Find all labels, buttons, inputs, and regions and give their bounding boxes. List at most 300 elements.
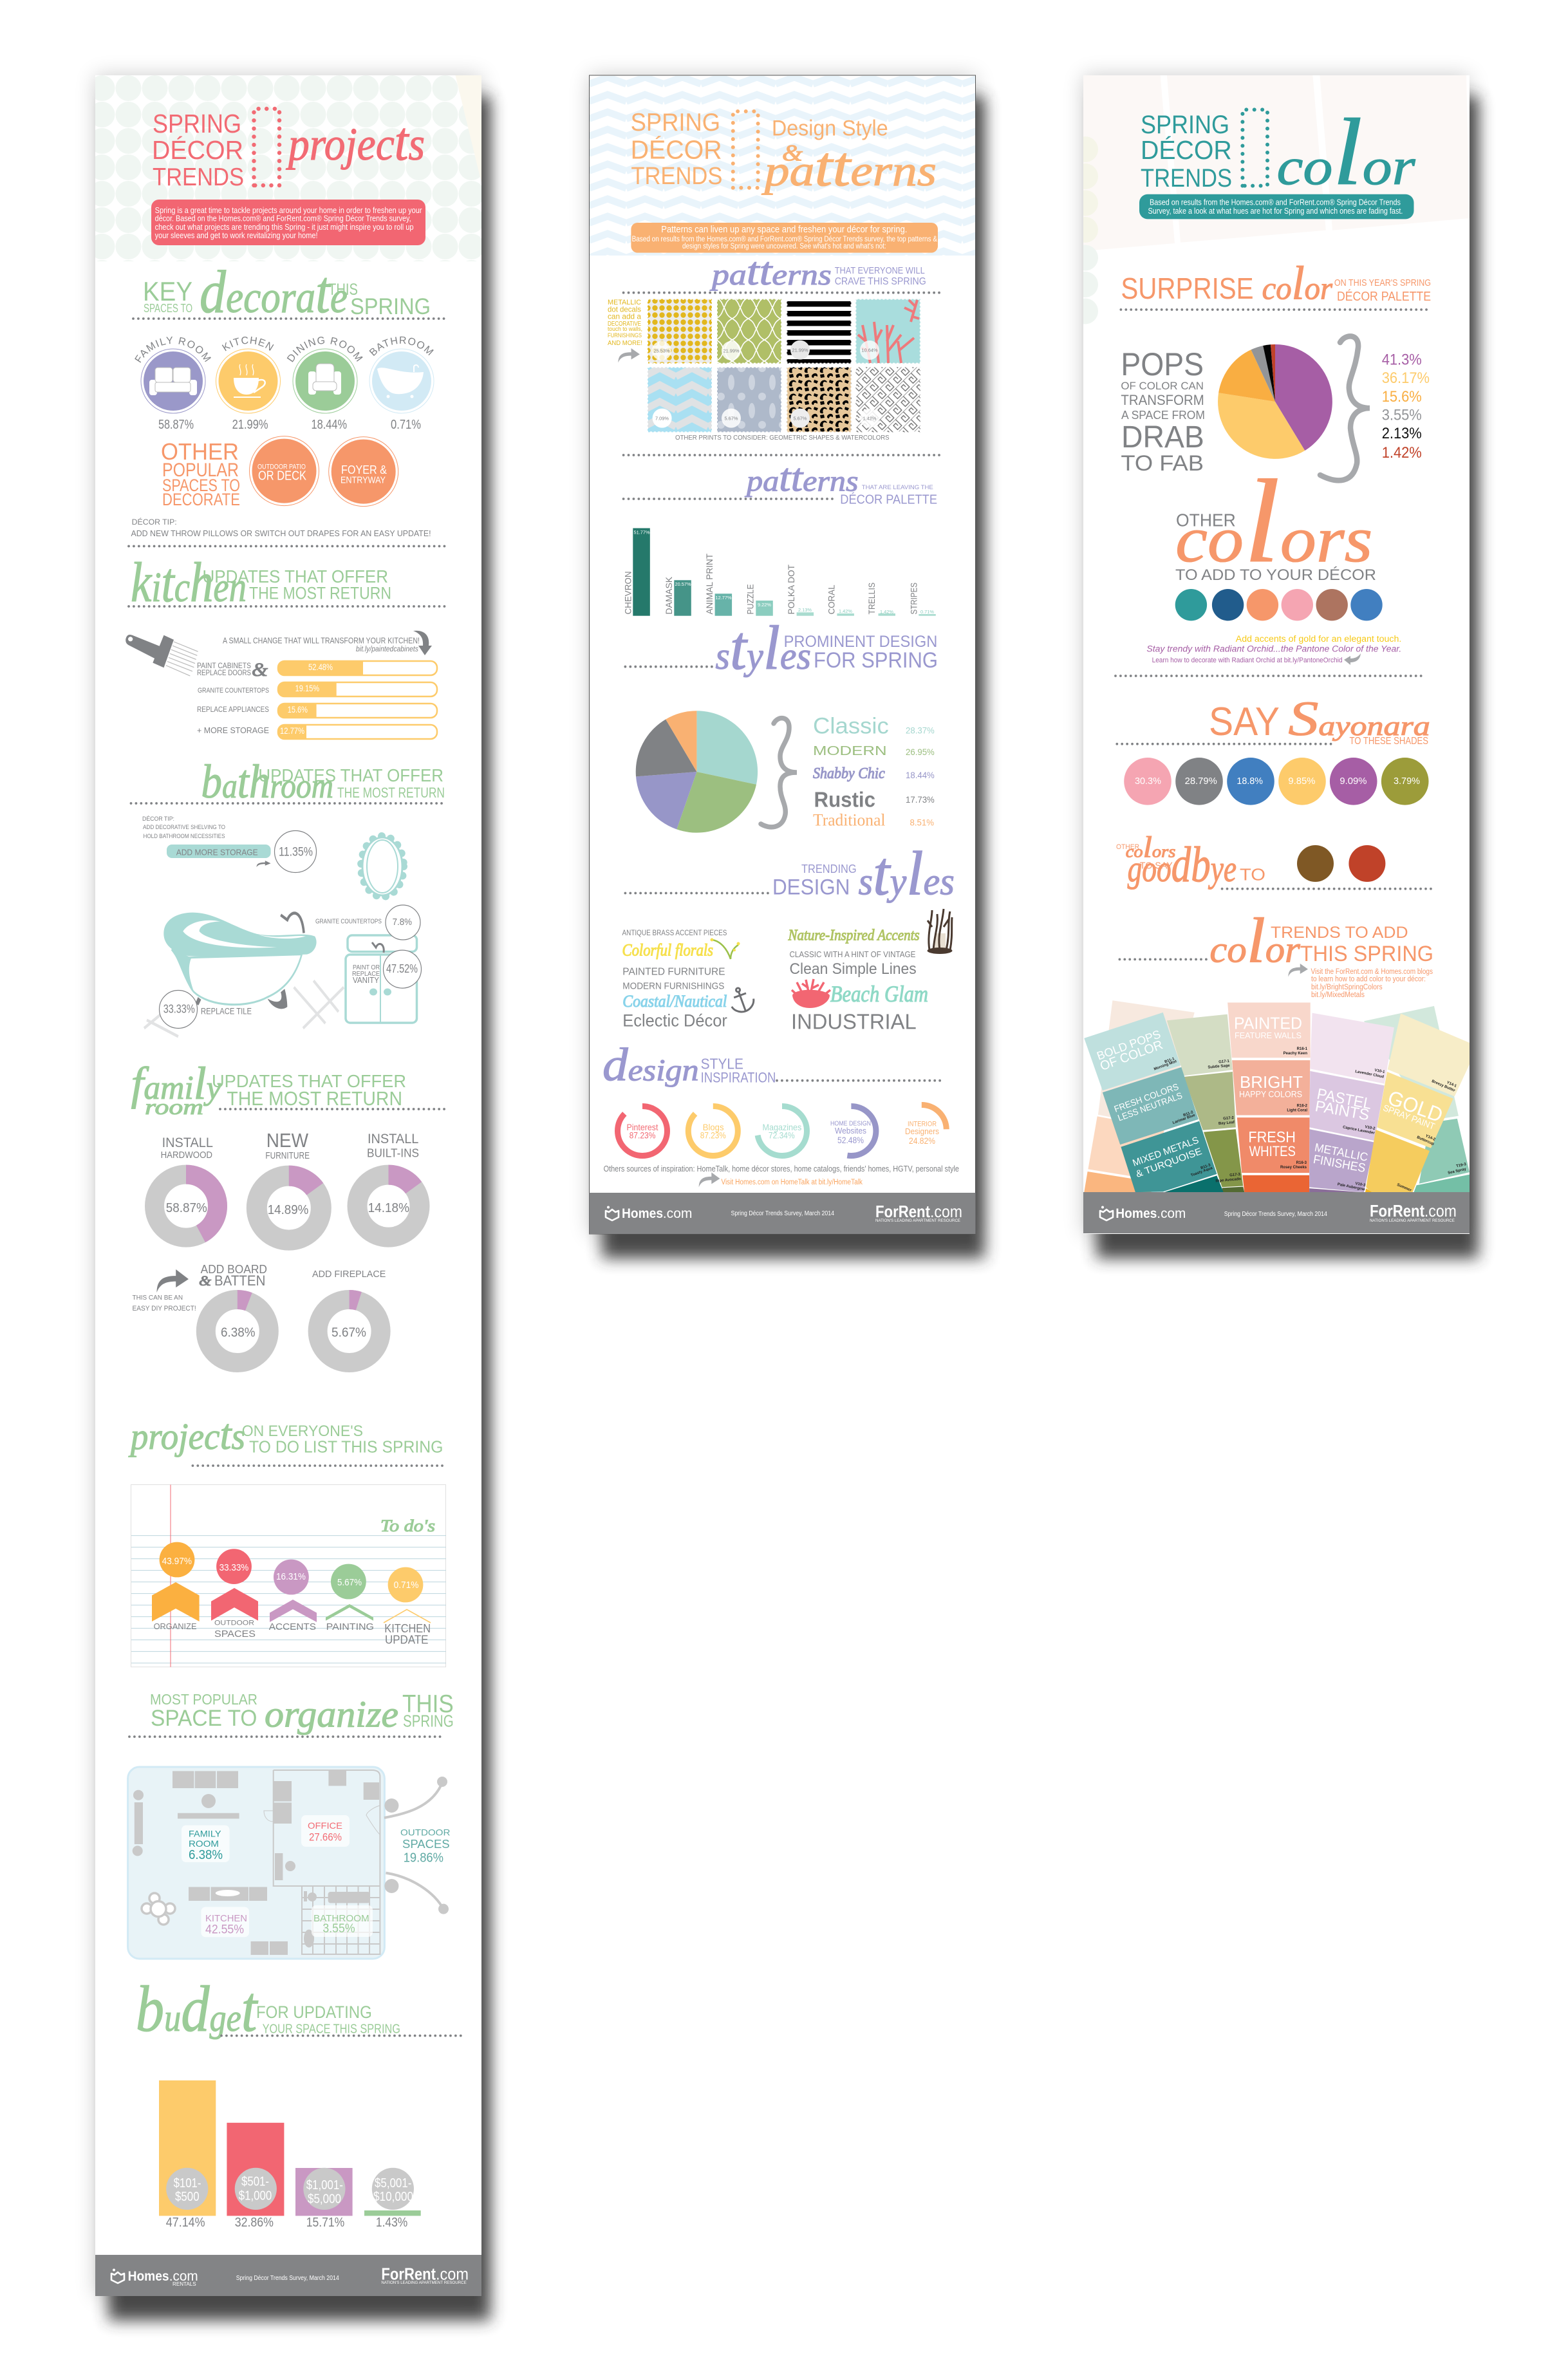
chip color names: Light Coral <box>1287 1108 1307 1112</box>
chip color names: Larimar Blue <box>1172 1114 1196 1125</box>
chip color names: Y14-2 <box>1424 1134 1436 1142</box>
chip color names: Buttercup <box>1416 1135 1435 1146</box>
donut: new furniture: NEW <box>266 1129 309 1152</box>
bar chart: leaving patterns: TRELLIS <box>867 583 877 614</box>
swatch: trellis: 21.99% <box>723 348 740 354</box>
bathroom decor tip <box>142 816 225 839</box>
swatches: shades to say sayonara: 9.85% <box>1288 776 1316 787</box>
heading: bathroom updates: UPDATES THAT OFFER <box>258 765 443 785</box>
text: pops of color: TRANSFORM <box>1121 392 1204 408</box>
heading: design style inspiration: INSPIRATION <box>701 1069 776 1085</box>
bar chart: budget: $1,001- <box>306 2178 343 2192</box>
label: family room <box>182 1826 229 1862</box>
swatches: shades to say sayonara: 9.09% <box>1339 776 1367 787</box>
heading: family room updates: room <box>145 1096 203 1119</box>
legend: design styles: 8.51% <box>910 817 934 828</box>
bar chart: kitchen updates: 12.77% <box>280 725 304 736</box>
heading: projects on everyone's to do list: TO DO LIST THIS SPRING <box>249 1437 443 1456</box>
chip color names <box>1153 1047 1467 1193</box>
list: trending styles left: Eclectic Décor <box>622 1011 727 1030</box>
title: spring decor trends projects: DÉCOR <box>152 135 243 165</box>
chip text: blue chip: BOLD POPS <box>1095 1027 1162 1063</box>
heading: patterns everyone will crave: THAT EVERYONE WILL <box>835 265 925 276</box>
metallic dots note: DECORATIVE <box>608 321 641 328</box>
callout: intro: check out what projects are trending this Spring - it just might inspire you to roll up <box>155 223 414 232</box>
key space percentages: 0.71% <box>391 418 421 432</box>
add more storage label and value: 11.35% <box>279 846 313 859</box>
swatch: polka dots: 25.53% <box>654 348 670 354</box>
ring: blogs <box>688 1106 738 1156</box>
label: kitchen: KITCHEN <box>205 1913 247 1924</box>
swatches: shades to say sayonara: 18.8% <box>1237 776 1263 787</box>
donut: install built-ins: INSTALL <box>368 1132 418 1146</box>
footer: projects panel: .com <box>436 2265 469 2284</box>
bar chart: leaving patterns: DAMASK <box>664 577 674 614</box>
heading: most popular space to organize: SPRING <box>403 1711 454 1730</box>
shadow: patterns panel <box>590 75 985 1258</box>
panel: color <box>1072 75 1470 1234</box>
callout: intro: Spring is a great time to tackle projects around your home in order to freshen up your <box>155 206 422 215</box>
heading: other colors to say goodbye to: OTHER <box>1116 843 1139 851</box>
footer: patterns panel: .com <box>930 1202 962 1221</box>
heading: other popular spaces: OTHER <box>161 438 239 465</box>
swatch: animal print: 5.67% <box>793 416 807 421</box>
icon: twig vase <box>927 909 953 954</box>
title: spring decor trends design style and patterns <box>631 109 937 198</box>
heading: patterns leaving the palette: patterns <box>745 457 859 500</box>
icon: family room circle <box>135 336 211 413</box>
heading: other popular spaces: SPACES TO <box>162 476 240 495</box>
heading: most popular space to organize <box>150 1690 454 1735</box>
legend: design styles: Traditional <box>813 811 886 830</box>
list: trending styles left <box>622 928 756 1030</box>
heading: most popular space to organize: MOST POPULAR <box>150 1691 257 1708</box>
chip text: lavender chip: METALLIC <box>1314 1141 1369 1164</box>
heading: surprise color: SURPRISE <box>1121 272 1254 305</box>
chip color names: Subtle Sage <box>1208 1064 1231 1070</box>
heading: family room updates <box>131 1058 406 1119</box>
note: gold and radiant orchid: Learn how to decorate with Radiant Orchid at bit.ly/PantoneOrchid <box>1152 657 1343 664</box>
swatches: goodbye colors <box>1297 845 1385 882</box>
legend: color percentages <box>1382 351 1430 462</box>
heading: kitchen updates <box>131 552 391 614</box>
heading: patterns leaving the palette <box>745 457 937 507</box>
bar chart: budget: $500 <box>175 2190 200 2204</box>
heading: trending design styles: DESIGN <box>772 875 850 900</box>
key space percentages: 18.44% <box>312 418 347 432</box>
heading: other colors to say goodbye to: TO SAY <box>1140 861 1173 872</box>
ring: magazines: 72.34% <box>769 1130 795 1141</box>
legend: design styles <box>813 714 935 830</box>
list: trending styles right: Nature-Inspired Accents <box>788 928 920 944</box>
icon: vanity: 47.52% <box>386 962 418 975</box>
chip color names: B11-1 <box>1164 1057 1175 1064</box>
footer: patterns panel: Spring Décor Trends Survey, March 2014 <box>731 1210 834 1217</box>
heading: family room updates: THE MOST RETURN <box>227 1087 402 1110</box>
donut: new furniture: FURNITURE <box>265 1150 310 1161</box>
header background paint chips <box>1072 75 1470 324</box>
icon: bathroom circle <box>369 336 434 413</box>
outdoor spaces: OUTDOOR <box>400 1827 450 1837</box>
callout: intro: décor. Based on the Homes.com® and ForRent.com® Spring Décor Trends survey, <box>155 214 411 223</box>
note: gold and radiant orchid: Stay trendy with Radiant Orchid...the Pantone Color of the Year. <box>1146 644 1401 654</box>
label: office: OFFICE <box>308 1820 342 1831</box>
bathroom decor tip: DÉCOR TIP: <box>142 816 174 823</box>
title: spring decor trends design style and patterns: Design Style <box>772 117 888 141</box>
metallic dots note: can add a <box>608 312 641 321</box>
title: spring decor trends color <box>1141 100 1416 205</box>
item: organize: 43.97% <box>162 1556 192 1567</box>
item: outdoor spaces: 33.33% <box>219 1563 248 1573</box>
legend: design styles: Classic <box>813 714 889 739</box>
list: trending styles left: MODERN FURNISHINGS <box>622 980 724 991</box>
chip text: coral chip: FRESH <box>1248 1129 1296 1146</box>
heading: design style inspiration <box>602 1039 776 1091</box>
bar chart: kitchen updates: REPLACE APPLIANCES <box>197 705 269 714</box>
header background polka dots <box>95 75 481 261</box>
bar chart: kitchen updates <box>197 659 437 739</box>
bar chart: budget: $1,000 <box>239 2189 272 2203</box>
item: kitchen update: UPDATE <box>385 1634 429 1647</box>
swatch: chevron: 7.09% <box>655 416 669 421</box>
item: painting: 5.67% <box>337 1578 362 1588</box>
heading: key spaces to decorate: KEY <box>143 276 192 306</box>
icon: vanity: PAINT OR <box>353 964 380 971</box>
kitchen note and arrow: bit.ly/paintedcabinets <box>356 644 418 653</box>
chip color names: Sea Spray <box>1448 1167 1467 1175</box>
bar chart: leaving patterns: CORAL <box>827 584 837 614</box>
icon: floral sprig <box>711 939 740 959</box>
list: trending styles left: Coastal/Nautical <box>622 992 727 1011</box>
chip color names: B11-3 <box>1200 1163 1211 1170</box>
heading: trending design styles <box>772 839 955 909</box>
legend: color percentages: 15.6% <box>1382 388 1422 406</box>
chip text: lavender chip: PAINTS <box>1314 1097 1370 1124</box>
ring: magazines <box>757 1106 807 1156</box>
bar chart: leaving patterns <box>623 528 936 616</box>
swatches: colors to add <box>1175 589 1383 621</box>
chip color names: G17-3 <box>1229 1173 1241 1177</box>
chip color names: V10-2 <box>1365 1125 1376 1131</box>
heading: patterns everyone will crave: CRAVE THIS SPRING <box>835 276 926 287</box>
footer: projects panel <box>95 2255 481 2296</box>
title: spring decor trends projects: projects <box>285 110 425 172</box>
donut: add fireplace: ADD FIREPLACE <box>312 1269 386 1280</box>
swatches: shades to say sayonara: 28.79% <box>1185 776 1217 787</box>
ring: home design websites: 52.48% <box>837 1135 864 1145</box>
ring: home design websites: HOME DESIGN <box>830 1119 871 1127</box>
heading: patterns leaving the palette: THAT ARE LEAVING THE <box>862 484 933 491</box>
metallic dots note <box>608 299 642 362</box>
heading: other colors to say goodbye to: colors <box>1126 831 1175 864</box>
icon: coral <box>792 979 830 1008</box>
footer: projects panel: Homes <box>128 2269 169 2284</box>
chip text: lavender chip <box>1312 1085 1373 1175</box>
panel: patterns <box>590 75 976 1234</box>
bar chart: kitchen updates: + MORE STORAGE <box>197 725 269 735</box>
metallic dots note: dot decals <box>608 304 641 313</box>
bathroom decor tip: ADD DECORATIVE SHELVING TO <box>143 824 225 830</box>
item: outdoor spaces: OUTDOOR <box>214 1619 254 1627</box>
chart: notebook to do list <box>131 1484 446 1667</box>
heading: most popular space to organize: organize <box>265 1693 398 1735</box>
badge: foyer and entryway: FOYER & <box>341 463 387 476</box>
heading: surprise color: DÉCOR PALETTE <box>1337 289 1431 304</box>
title: spring decor trends design style and patterns: DÉCOR <box>631 135 722 164</box>
chip text: coral chip: HAPPY COLORS <box>1239 1089 1302 1099</box>
chip text: blue chip: OF COLOR <box>1098 1038 1165 1074</box>
floor plan <box>128 1767 384 1959</box>
metallic dots note: AND MORE! <box>608 340 642 347</box>
bar chart: budget: $101- <box>174 2176 201 2190</box>
bar chart: kitchen updates: & <box>252 659 268 680</box>
footer: patterns panel: Homes <box>622 1206 663 1221</box>
label: family room: 6.38% <box>189 1848 223 1862</box>
heading: key spaces to decorate <box>143 259 431 326</box>
heading: other popular spaces <box>161 438 240 509</box>
label: office <box>301 1815 350 1847</box>
icon: kitchen circle <box>216 336 281 413</box>
bar chart: kitchen updates: 52.48% <box>308 662 333 672</box>
item: accents: 16.31% <box>276 1572 306 1582</box>
heading: surprise color <box>1121 257 1431 310</box>
donut: install built-ins: BUILT-INS <box>367 1147 419 1160</box>
heading: family room updates: UPDATES THAT OFFER <box>212 1071 406 1091</box>
callout: patterns intro: Patterns can liven up any space and freshen your décor for spring. <box>661 225 907 235</box>
heading: other popular spaces: POPULAR <box>162 460 239 481</box>
icon: vanity <box>346 905 421 1023</box>
donut: add board and batten: & <box>199 1273 212 1289</box>
text: pops of color: POPS <box>1121 346 1204 382</box>
heading: say sayonara <box>1209 692 1430 747</box>
shadow: projects panel <box>95 75 490 2321</box>
callout: color intro <box>1139 194 1414 219</box>
heading: key spaces to decorate: SPRING <box>350 294 431 319</box>
label: bathroom: 3.55% <box>322 1922 355 1936</box>
icon: dining room circle <box>287 337 363 413</box>
bar chart: budget: $5,000 <box>308 2192 341 2206</box>
heading: most popular space to organize: THIS <box>402 1690 454 1718</box>
label: office: 27.66% <box>309 1831 342 1844</box>
bar chart: kitchen updates: REPLACE DOORS <box>197 668 251 677</box>
list: trending styles right: CLASSIC WITH A HINT OF VINTAGE <box>789 949 916 959</box>
title: spring decor trends color: DÉCOR <box>1141 135 1232 165</box>
badge: outdoor patio or deck: OR DECK <box>258 469 307 483</box>
label: kitchen: 42.55% <box>205 1923 244 1937</box>
bar chart: kitchen updates: GRANITE COUNTERTOPS <box>198 687 269 695</box>
note: visit blogs <box>1288 964 1433 999</box>
icon: bathroom circle: BATHROOM <box>369 336 434 356</box>
callout: patterns intro: design styles for Spring were uncovered. See what's hot and what's not: <box>682 243 886 250</box>
heading: styles prominent design: PROMINENT DESIGN <box>784 633 937 651</box>
note: visit blogs: to learn how to add color to your décor: <box>1311 976 1426 984</box>
swatch: stripes <box>787 299 851 364</box>
key space percentages: 58.87% <box>158 418 194 432</box>
chip color names: Ripe Avocado <box>1215 1177 1242 1183</box>
arrow and DIY note: THIS CAN BE AN <box>133 1294 183 1302</box>
heading: projects on everyone's to do list <box>128 1410 443 1459</box>
bar chart: leaving patterns: CHEVRON <box>623 572 633 614</box>
legend: color percentages: 41.3% <box>1382 351 1422 369</box>
title: spring decor trends color: SPRING <box>1141 111 1229 139</box>
ring: interior designers: Designers <box>905 1126 939 1136</box>
list: trending styles right: Clean Simple Lines <box>789 960 917 978</box>
heading: patterns everyone will crave: patterns <box>709 250 832 294</box>
note: visit blogs: bit.ly/MixedMetals <box>1311 991 1365 999</box>
decor tip: DÉCOR TIP: <box>132 517 177 527</box>
bathroom decor tip: HOLD BATHROOM NECESSITIES <box>143 833 225 839</box>
label: family room: ROOM <box>189 1838 219 1849</box>
heading: other colors to add: OTHER <box>1176 510 1236 530</box>
footer: color panel: .com <box>1157 1206 1186 1221</box>
bar chart: budget: 1.43% <box>376 2216 407 2230</box>
chip color names: Peachy Keen <box>1283 1052 1307 1056</box>
heading: say sayonara: SAY <box>1209 700 1280 744</box>
bar chart: leaving patterns: 12.77% <box>716 595 732 601</box>
decor tip <box>131 517 431 538</box>
bathroom values <box>160 918 382 1029</box>
list: trending styles right <box>788 909 953 1033</box>
footer: patterns panel: .com <box>663 1206 693 1221</box>
arrow and DIY note <box>133 1269 196 1312</box>
key space percentages <box>158 418 421 432</box>
chip text: yellow chip: GOLD <box>1385 1086 1446 1127</box>
bar chart: leaving patterns: 1.42% <box>880 609 893 615</box>
swatch: polka dots <box>648 299 712 364</box>
title: spring decor trends projects: SPRING <box>153 109 241 138</box>
legend: design styles: 18.44% <box>906 770 935 780</box>
icon: vanity: REPLACE <box>352 971 380 978</box>
heading: color trends to add <box>1209 904 1433 976</box>
footer: projects panel: .com <box>169 2269 198 2284</box>
chip color names: R16-3 <box>1296 1161 1307 1165</box>
icon: dining room circle: DINING ROOM <box>287 337 363 362</box>
swatches: shades to say sayonara: 3.79% <box>1394 776 1420 787</box>
heading: color trends to add: THIS SPRING <box>1300 942 1433 966</box>
bar chart: budget: 32.86% <box>235 2216 274 2230</box>
bar chart: budget: $501- <box>241 2174 269 2189</box>
chip color names: R16-2 <box>1297 1105 1308 1108</box>
heading: most popular space to organize: SPACE TO <box>151 1706 257 1731</box>
heading: kitchen updates: UPDATES THAT OFFER <box>202 566 388 586</box>
swatch: puzzle: 1.42% <box>863 416 877 421</box>
ring: blogs: 87.23% <box>700 1130 726 1141</box>
outdoor spaces: 19.86% <box>404 1851 443 1865</box>
callout: patterns intro: Based on results from the Homes.com® and ForRent.com® Spring Décor Trends survey, the top patterns & <box>632 236 937 243</box>
swatch: animal print <box>787 367 851 432</box>
swatches: shades to say sayonara <box>1124 758 1429 805</box>
donut: add fireplace <box>312 1269 386 1363</box>
heading: surprise color: color <box>1262 257 1333 310</box>
text: pops of color: A SPACE FROM <box>1121 409 1205 422</box>
heading: patterns everyone will crave <box>709 250 926 294</box>
badge: outdoor patio or deck <box>250 436 319 506</box>
footer: patterns panel <box>590 1193 976 1234</box>
heading: other colors to add: TO ADD TO YOUR DÉCOR <box>1175 566 1376 584</box>
note: visit blogs: bit.ly/BrightSpringColors <box>1311 984 1383 991</box>
bar chart: leaving patterns: 20.57% <box>675 581 691 587</box>
chip text: blue chip <box>1095 1027 1204 1180</box>
chip color names: Pale Aubergine <box>1337 1182 1366 1192</box>
item: accents <box>269 1560 317 1632</box>
note: other prints: OTHER PRINTS TO CONSIDER: GEOMETRIC SHAPES & WATERCOLORS <box>675 434 890 442</box>
note: other sources: Visit Homes.com on HomeTalk at bit.ly/HomeTalk <box>721 1179 863 1186</box>
heading: other colors to say goodbye to: goodbye <box>1128 836 1237 892</box>
heading: projects on everyone's to do list: ON EVERYONE'S <box>242 1423 363 1440</box>
footer: color panel: .com <box>1424 1201 1457 1220</box>
heading: color trends to add: color <box>1209 904 1300 976</box>
heading: patterns leaving the palette: DÉCOR PALETTE <box>840 492 937 507</box>
chip color names: Rosey Cheeks <box>1280 1166 1307 1170</box>
badge: outdoor patio or deck: OUTDOOR PATIO <box>257 463 306 471</box>
item: accents: ACCENTS <box>269 1621 316 1632</box>
swatch: coral <box>855 299 920 364</box>
chip color names: G17-2 <box>1223 1116 1235 1121</box>
swatch: trellis <box>717 299 781 364</box>
legend: design styles: MODERN <box>813 744 887 758</box>
decor tip: ADD NEW THROW PILLOWS OR SWITCH OUT DRAPES FOR AN EASY UPDATE! <box>131 529 431 538</box>
text: pops of color: TO FAB <box>1121 451 1204 476</box>
chart: notebook to do list: To do's <box>380 1517 435 1535</box>
list: trending styles right: INDUSTRIAL <box>791 1009 917 1033</box>
heading: styles prominent design: FOR SPRING <box>814 648 938 673</box>
donut: install hardwood: INSTALL <box>162 1135 213 1150</box>
item: painting: PAINTING <box>326 1621 374 1632</box>
chip text: coral chip: BRIGHT <box>1240 1072 1303 1092</box>
icon: family room circle: FAMILY ROOM <box>135 336 211 363</box>
bar chart: budget: $10,000 <box>373 2190 413 2204</box>
outdoor spaces: SPACES <box>402 1838 450 1851</box>
chip text: blue chip: LESS NEUTRALS <box>1116 1090 1184 1123</box>
metallic dots note: METALLIC <box>608 299 641 306</box>
footer: patterns panel: NATION'S LEADING APARTMENT RESOURCE <box>875 1219 961 1223</box>
item: outdoor spaces: SPACES <box>214 1629 256 1639</box>
footer: projects panel: RENTALS <box>173 2281 196 2287</box>
text: pops of color <box>1121 346 1205 476</box>
bar chart: leaving patterns: 0.71% <box>920 609 934 615</box>
badge: foyer and entryway: ENTRYWAY <box>341 475 386 485</box>
heading: family room updates: family <box>131 1058 221 1109</box>
note: visit blogs: Visit the ForRent.com & Homes.com blogs <box>1311 968 1433 976</box>
chip text: blue chip: FRESH COLORS <box>1113 1081 1180 1114</box>
heading: kitchen updates: THE MOST RETURN <box>249 584 391 603</box>
legend: design styles: 28.37% <box>906 725 935 736</box>
footer: color panel <box>1083 1192 1470 1233</box>
legend: design styles: 26.95% <box>906 747 935 757</box>
chip color names: G17-1 <box>1218 1060 1230 1064</box>
bar chart: leaving patterns: 9.22% <box>758 602 771 608</box>
bar chart: leaving patterns: POLKA DOT <box>787 565 796 614</box>
bathroom values: REPLACE TILE <box>201 1007 252 1016</box>
list: trending styles left: PAINTED FURNITURE <box>622 967 725 977</box>
chip color names: Breezy Butter <box>1431 1079 1456 1093</box>
swatches: shades to say sayonara: 30.3% <box>1135 776 1161 787</box>
callout: intro <box>151 200 425 245</box>
chip text: coral chip: WHITES <box>1249 1143 1296 1159</box>
add more storage label and value: ADD MORE STORAGE <box>176 848 258 857</box>
chip color names: R16-1 <box>1297 1047 1308 1051</box>
kitchen note and arrow <box>223 631 432 655</box>
heading: bathroom updates: THE MOST RETURN <box>337 785 445 801</box>
legend: design styles: Rustic <box>814 788 875 812</box>
item: outdoor spaces <box>211 1549 258 1639</box>
heading: key spaces to decorate: SPACES TO <box>144 302 192 315</box>
heading: key spaces to decorate: THIS <box>328 281 358 299</box>
chip text: blue chip: MIXED METALS <box>1131 1135 1200 1169</box>
donut: add board and batten: ADD BOARD <box>201 1263 267 1276</box>
bar chart: budget: $5,001- <box>375 2176 411 2190</box>
bar chart: budget: 47.14% <box>166 2216 205 2230</box>
